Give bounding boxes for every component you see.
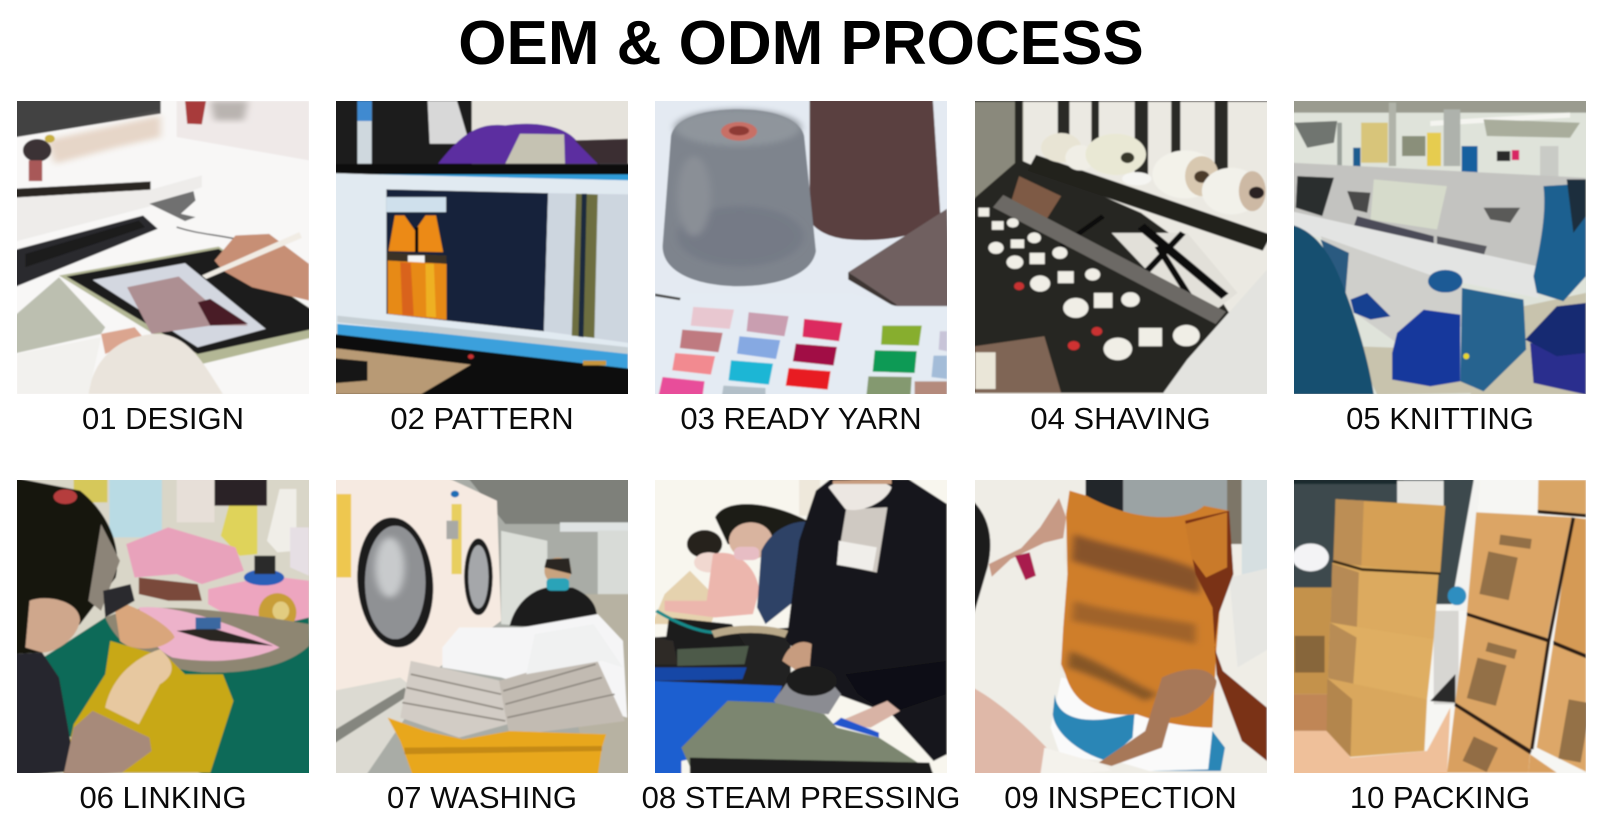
panel: 06 linking: [17, 480, 309, 814]
panel: 07 washing: [336, 480, 628, 814]
photo: stacked cardboard cartons: [1294, 480, 1586, 773]
caption: 02 PATTERN: [390, 401, 574, 436]
photo: pattern software on monitor: [336, 101, 628, 394]
photo: flat knitting machine: [1294, 101, 1586, 394]
panel: 05 knitting: [1294, 101, 1586, 436]
caption: 04 SHAVING: [1030, 401, 1211, 436]
panel: 01 design: [17, 101, 309, 436]
caption: 09 INSPECTION: [1004, 780, 1237, 814]
photo: designer drawing on tablet: [17, 101, 309, 394]
photo: inspecting orange sweater on form: [975, 480, 1267, 773]
caption: 07 WASHING: [387, 780, 577, 814]
title: OEM & ODM PROCESS: [458, 9, 1144, 78]
panel: 04 shaving: [975, 101, 1267, 436]
panel: 02 pattern: [336, 101, 628, 436]
photo: worker linking garment: [17, 480, 309, 773]
panel: 09 inspection: [975, 480, 1267, 814]
caption: 05 KNITTING: [1346, 401, 1534, 436]
photo: industrial washers and laundry: [336, 480, 628, 773]
photo: yarn winding machine: [975, 101, 1267, 394]
panel: 10 packing: [1294, 480, 1586, 814]
caption: 01 DESIGN: [82, 401, 244, 436]
caption: 10 PACKING: [1350, 780, 1530, 814]
caption: 06 LINKING: [79, 780, 247, 814]
photo: workers steam pressing garments: [655, 480, 947, 773]
caption: 03 READY YARN: [680, 401, 922, 436]
panel: 03 ready yarn: [655, 101, 947, 436]
caption: 08 STEAM PRESSING: [642, 780, 960, 814]
photo: yarn cones and colour card: [655, 101, 947, 394]
panel: 08 steam pressing: [642, 480, 960, 814]
